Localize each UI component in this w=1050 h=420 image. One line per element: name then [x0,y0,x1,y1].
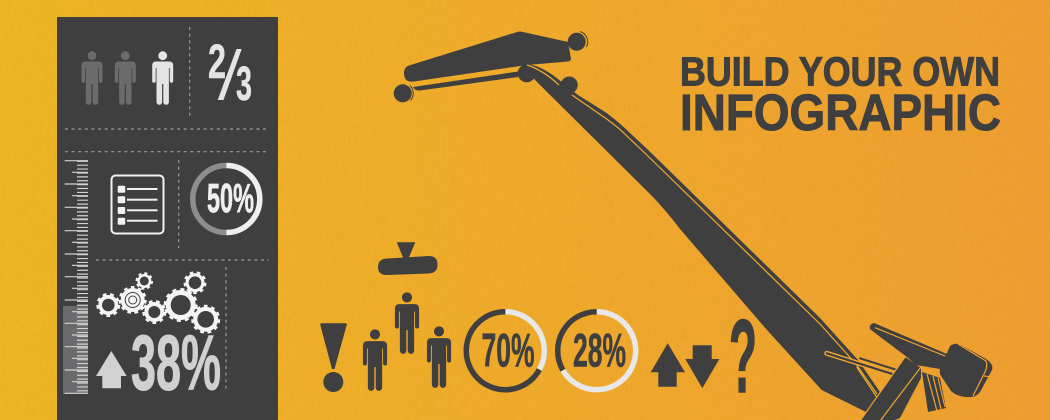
ruler [63,161,88,394]
crane handle [860,357,921,420]
illustration: crane [394,32,992,420]
fraction: two thirds [208,36,252,111]
icon: three people [363,292,451,391]
stat: 38%: 38% [131,318,221,406]
icon: exclamation mark [320,323,347,392]
donut: 70%: 70% [482,324,534,378]
crane upper jib [404,32,571,82]
title: INFOGRAPHIC [680,84,1001,141]
panel background [57,17,278,420]
icon: checklist [112,176,164,234]
donut: 50% [193,166,260,232]
ruler highlight [63,306,88,394]
icon: cluster of gears [98,273,219,332]
panel: left statistics column [57,17,278,420]
icon: T-shaped marker [378,242,438,275]
crane fringe [922,372,946,412]
donut: 70% [466,312,544,390]
icon: three people, one highlighted [82,51,173,105]
crane head [940,344,992,397]
crane hammer wedge [870,323,947,369]
fraction: two thirds: 3 [236,58,252,111]
icon: down arrow [685,345,719,388]
donut: 28%: 28% [573,324,626,378]
icon: up arrow [96,351,127,388]
donut: 50%: 50% [207,175,254,221]
icon: up arrow [651,343,685,387]
title: BUILD YOUR OWN [680,48,1000,94]
donut: 28% [558,312,636,390]
crane long arm [526,64,880,412]
title [680,48,1001,141]
text: ? [729,299,757,415]
fraction: two thirds: 2 [208,36,226,89]
crane rod [827,353,906,378]
